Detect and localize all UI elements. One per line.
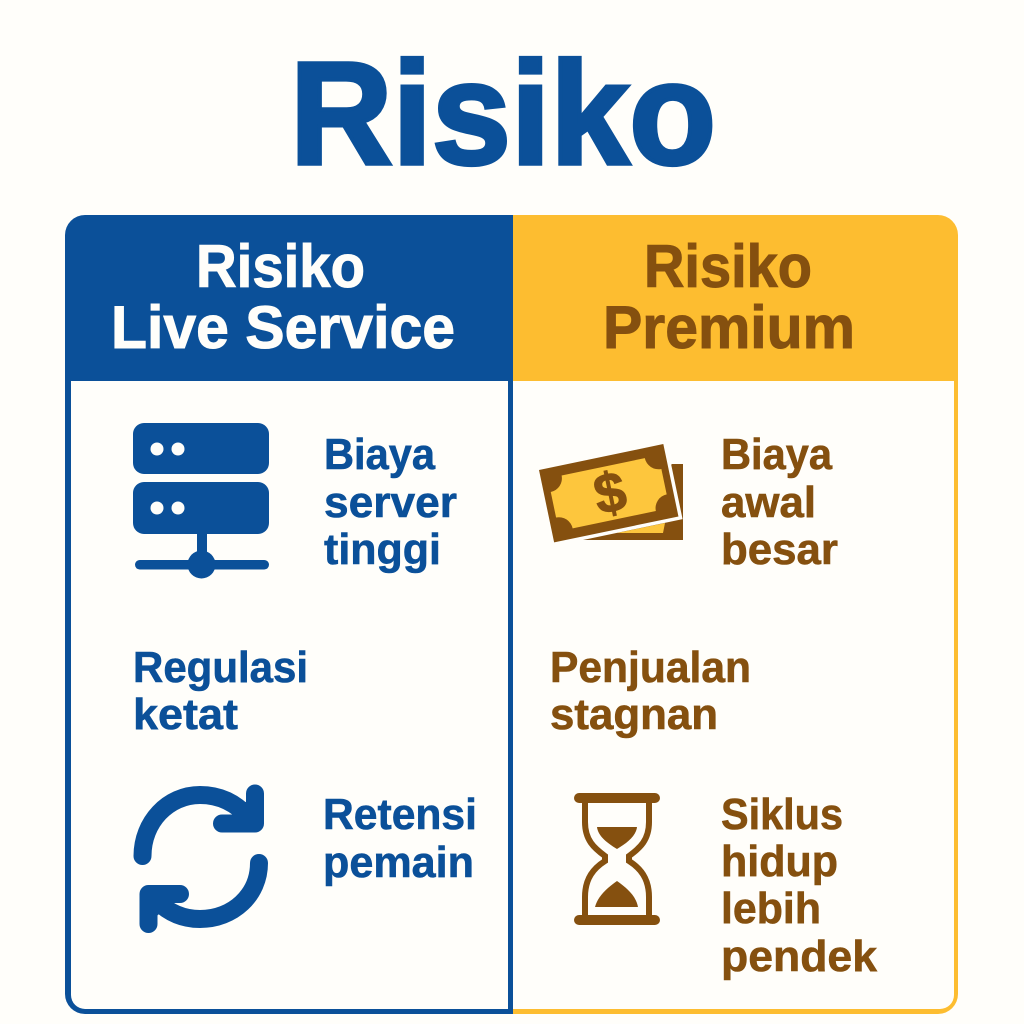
title: Risiko: [290, 32, 716, 195]
text: Biaya server tinggi: Biaya: [324, 430, 435, 479]
text: Biaya awal besar: awal: [721, 478, 816, 527]
text: Regulasi ketat: Regulasi: [133, 643, 308, 692]
heading: Risiko Premium: Risiko: [644, 233, 812, 300]
text: Biaya server tinggi: tinggi: [324, 525, 441, 574]
text: Penjualan stagnan: Penjualan: [550, 643, 751, 692]
icon: refresh arrows: [142, 794, 259, 924]
text: Regulasi ketat: [133, 643, 308, 739]
text: Regulasi ketat: ketat: [133, 690, 238, 739]
text: Siklus hidup lebih pendek: hidup: [721, 837, 838, 886]
heading: Risiko Live Service: Live Service: [111, 294, 455, 361]
icon: server: [133, 423, 269, 578]
text: Biaya awal besar: besar: [721, 525, 838, 574]
text: Penjualan stagnan: stagnan: [550, 690, 718, 739]
heading: Risiko Live Service: Risiko: [196, 233, 365, 300]
icon: hourglass: [574, 793, 660, 925]
text: Retensi pemain: pemain: [323, 838, 474, 887]
text: Siklus hidup lebih pendek: lebih: [721, 884, 821, 933]
icon: money bills: [539, 444, 683, 542]
panel: Risiko Premium: [513, 215, 958, 1014]
text: Biaya server tinggi: server: [324, 478, 457, 527]
text: Biaya awal besar: Biaya: [721, 430, 832, 479]
text: Retensi pemain: [323, 790, 477, 887]
text: Biaya awal besar: [721, 430, 838, 574]
text: Biaya server tinggi: [324, 430, 457, 574]
dollar sign: $: [588, 458, 632, 527]
heading: Risiko Premium: [603, 233, 855, 361]
text: Siklus hidup lebih pendek: pendek: [721, 932, 878, 981]
heading: Risiko Live Service: [111, 233, 455, 361]
text: Retensi pemain: Retensi: [323, 790, 477, 839]
heading: Risiko Premium: Premium: [603, 294, 855, 361]
text: Siklus hidup lebih pendek: Siklus: [721, 790, 843, 839]
panel: Risiko Live Service: [65, 215, 513, 1014]
text: Penjualan stagnan: [550, 643, 751, 739]
text: Siklus hidup lebih pendek: [721, 790, 878, 981]
